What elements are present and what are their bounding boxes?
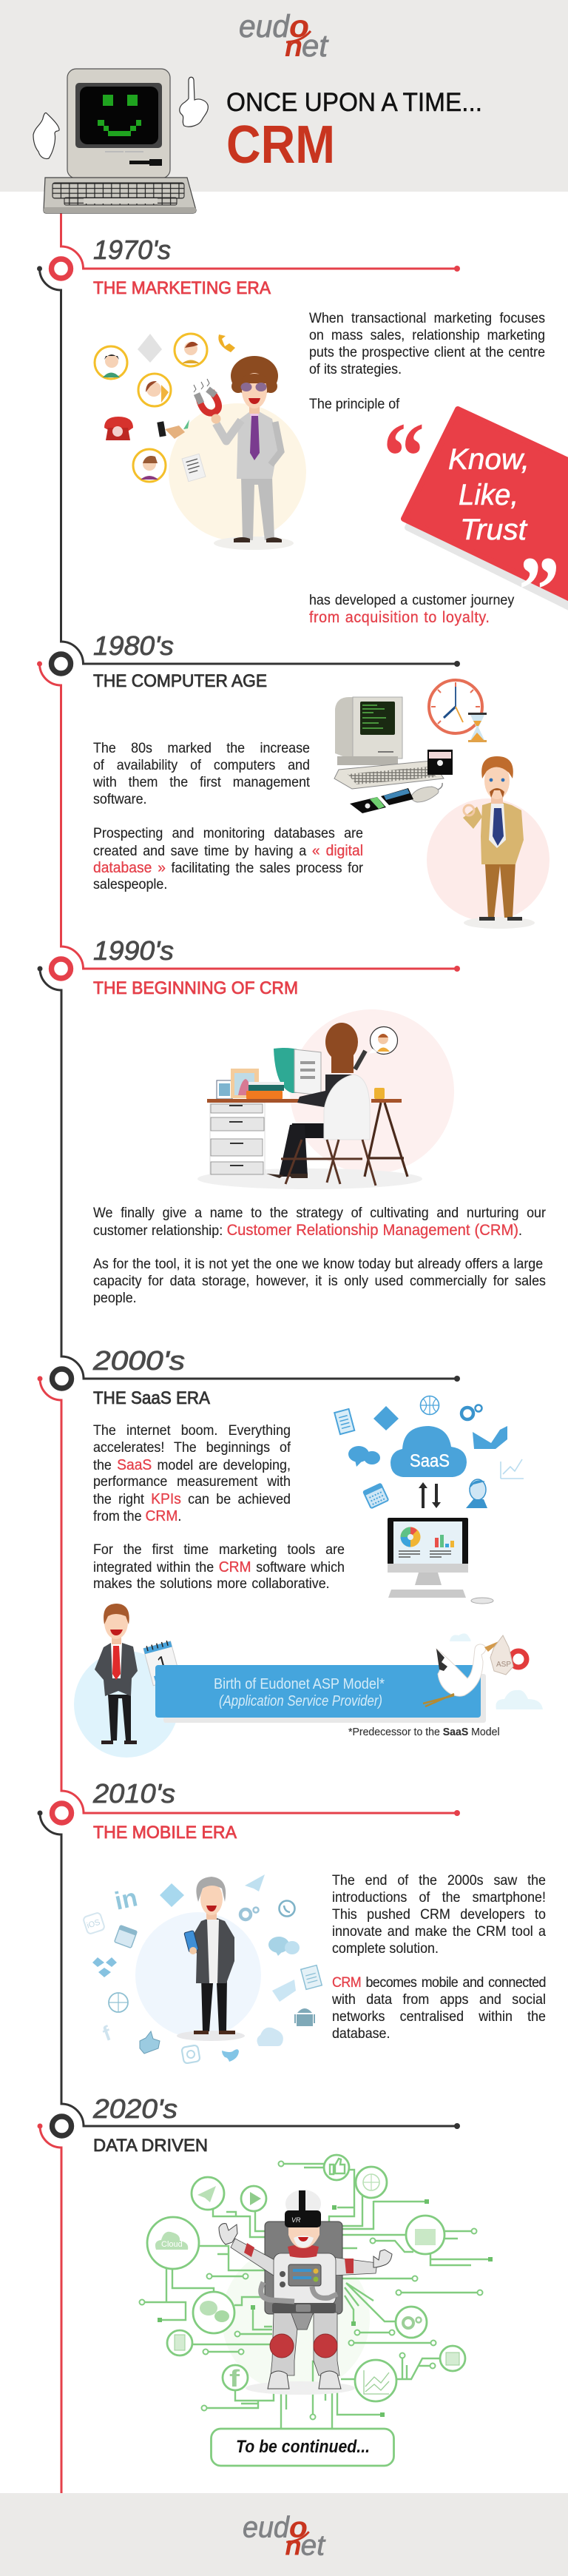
text: the 80s: The 80s marked the increase <box>93 741 310 756</box>
logo: et <box>302 28 329 63</box>
chart: green circuit network: f <box>229 2365 240 2392</box>
footer logo: n <box>285 2531 302 2561</box>
text: relationship marketing: of its strategies. <box>309 362 402 377</box>
icon: speech bubble <box>368 1027 398 1054</box>
icon: left glove <box>33 112 59 159</box>
callout: know like trust banner <box>383 403 568 644</box>
footer logo: o <box>289 2512 308 2544</box>
heading: the saas era: THE SaaS ERA <box>93 1388 210 1408</box>
text: the 80s: of availability of computers and <box>93 758 310 773</box>
text: crm becomes mobile: networks centralised within the <box>332 2009 546 2025</box>
callout: birth of eudonet: Birth of Eudonet ASP Model* <box>214 1676 385 1692</box>
icon: yellow phone <box>218 334 235 352</box>
heading: 1980's: 1980's <box>93 630 174 661</box>
callout: know like trust banner: “ <box>383 403 425 510</box>
icons: social and mobile: f <box>100 2022 115 2045</box>
text: the principle of: The principle of <box>309 397 399 412</box>
heading: data driven: DATA DRIVEN <box>93 2136 208 2156</box>
text: smartphone introduction: introductions of the smartphone! <box>332 1890 546 1906</box>
arrows: up and down <box>419 1482 441 1508</box>
logo: o <box>289 9 309 44</box>
mascot computer <box>44 69 196 213</box>
text: footnote: *Predecessor to the SaaS Model <box>348 1726 500 1738</box>
text: smartphone introduction: complete solution. <box>332 1941 439 1957</box>
text: crm becomes mobile: with data from apps and social <box>332 1992 546 2008</box>
callout: to be continued <box>212 2429 393 2466</box>
text: prospecting <box>93 826 363 892</box>
text: internet boom: accelerates! The beginnings of <box>93 1440 291 1456</box>
callout: know like trust banner: ” <box>518 537 560 644</box>
heading: 2010's: 2010's <box>92 1778 175 1809</box>
callout: birth of eudonet: (Application Service Provider) <box>219 1693 382 1709</box>
text: relationship marketing: When transactional marketing focuses <box>309 311 545 326</box>
heading: the beginning of crm: THE BEGINNING OF CRM <box>93 978 298 998</box>
text: marketing tools: makes the solutions more collaborative. <box>93 1576 330 1592</box>
text: internet boom: the right KPIs can be achieved <box>93 1490 291 1507</box>
illustration: man with moustache <box>427 756 550 929</box>
illustration: monitor dashboard <box>388 1518 493 1604</box>
icon: envelope diamond <box>138 334 162 363</box>
heading: 2020's: 2020's <box>92 2094 178 2124</box>
illustration: stork with logo <box>423 1633 543 1709</box>
footer logo: et <box>301 2530 326 2562</box>
illustration: desktop computer <box>334 697 444 802</box>
text: prospecting: Prospecting and monitoring databases are <box>93 826 363 841</box>
illustration: stork with logo: ASP <box>496 1661 511 1669</box>
callout: to be continued: To be continued... <box>236 2437 370 2457</box>
text: internet boom: The internet boom. Everything <box>93 1423 291 1439</box>
text: customer journey <box>309 593 515 626</box>
text: customer journey: from acquisition to loyalty. <box>309 609 490 626</box>
text: internet boom: performance measurement with <box>93 1474 291 1490</box>
logo <box>239 9 329 63</box>
text: smartphone introduction: This pushed CRM developers to <box>332 1907 546 1923</box>
header band <box>0 0 568 192</box>
text: we finally give a name: customer relationship: Customer Relationship Management (CRM). <box>93 1221 522 1239</box>
illustration: astronaut with vr headset: VR <box>291 2216 301 2224</box>
callout: know like trust banner: Trust <box>460 514 528 546</box>
heading: 2000's: 2000's <box>92 1345 185 1376</box>
chart: green circuit network: Cloud <box>161 2240 183 2249</box>
panel: 1970s <box>93 235 568 644</box>
icon: clock <box>429 680 482 733</box>
illustration: man with smartphone <box>135 1877 261 2041</box>
callout: know like trust banner: Know, <box>448 443 530 476</box>
text: marketing tools <box>93 1542 345 1592</box>
text: we finally give a name: We finally give a name to the strategy of cultivating and nurturing our <box>93 1205 546 1221</box>
footer band <box>0 2493 568 2576</box>
heading: the mobile era: THE MOBILE ERA <box>93 1823 237 1843</box>
text: marketing tools: For the first time marketing tools are <box>93 1542 345 1558</box>
footer logo <box>243 2512 326 2562</box>
heading: 1970's: 1970's <box>93 235 171 265</box>
text: prospecting: created and save time by having a « digital <box>93 842 363 859</box>
icon: hourglass <box>468 713 487 742</box>
icon: calendar <box>143 1640 180 1686</box>
text: prospecting: database » facilitating the sales process for <box>93 859 363 876</box>
icon: floppy disks <box>350 750 453 813</box>
icons: social and mobile: iOS <box>86 1918 101 1931</box>
icon: customer avatars <box>95 334 207 482</box>
icon: red telephone <box>104 417 133 440</box>
text: smartphone introduction: innovate and make the CRM tool a <box>332 1924 546 1940</box>
illustration: astronaut with vr headset <box>219 2190 392 2395</box>
text: crm becomes mobile: database. <box>332 2026 390 2042</box>
panel: 1990s <box>93 935 546 1306</box>
text: customer journey: has developed a customer journey <box>309 593 514 608</box>
text: the 80s <box>93 741 310 807</box>
heading: the computer age: THE COMPUTER AGE <box>93 671 267 691</box>
icon: letter <box>182 454 206 482</box>
icon: pointing hand <box>180 77 208 127</box>
illustration: person at desk <box>197 1009 454 1189</box>
title: CRM <box>226 115 335 175</box>
panel: 2020s <box>92 2094 493 2467</box>
icon: calendar: 1 <box>155 1652 169 1674</box>
text: relationship marketing: on mass sales, relationship marketing <box>309 328 545 343</box>
icon: handshake <box>157 420 189 439</box>
icons: social and mobile: in <box>112 1883 140 1916</box>
text: as for the tool <box>93 1257 546 1306</box>
footer logo: eud <box>243 2512 291 2544</box>
text: relationship marketing <box>309 311 545 377</box>
icons: social and mobile <box>83 1874 322 2064</box>
text: smartphone introduction: The end of the 2000s saw the <box>332 1873 546 1889</box>
text: crm becomes mobile: CRM becomes mobile and connected <box>332 1975 546 1991</box>
illustration: marketing man with magnet <box>169 356 306 550</box>
chart: green circuit network <box>139 2155 493 2429</box>
logo: n <box>285 30 302 63</box>
text: as for the tool: people. <box>93 1291 137 1306</box>
icons: saas floating <box>334 1396 524 1508</box>
title <box>226 88 482 175</box>
text: as for the tool: capacity for data storage, however, it is only used commercially for sales <box>93 1274 546 1289</box>
heading: 1990's: 1990's <box>93 935 174 966</box>
text: crm becomes mobile <box>331 1975 546 2042</box>
title: ONCE UPON A TIME... <box>226 88 482 117</box>
heading: the marketing era: THE MARKETING ERA <box>93 278 271 298</box>
text: internet boom <box>93 1423 291 1524</box>
text: the 80s: with them the first management <box>93 775 310 790</box>
icon: saas cloud: SaaS <box>410 1451 450 1471</box>
text: internet boom: from the CRM. <box>93 1507 181 1524</box>
text: we finally give a name <box>93 1205 546 1239</box>
panel: 2000s <box>74 1345 543 1758</box>
panel: 2010s <box>83 1778 546 2064</box>
panel: header <box>33 9 482 214</box>
logo: eud <box>239 9 291 44</box>
text: prospecting: salespeople. <box>93 877 167 892</box>
text: marketing tools: integrated within the CRM software which <box>93 1558 345 1575</box>
text: smartphone introduction <box>332 1873 546 1957</box>
callout: know like trust banner: Like, <box>459 479 518 511</box>
text: the 80s: software. <box>93 792 146 807</box>
icon: saas cloud <box>390 1426 467 1477</box>
text: internet boom: the SaaS model are developing, <box>93 1456 291 1473</box>
text: as for the tool: As for the tool, it is not yet the one we know today but already offers a large <box>93 1257 543 1272</box>
text: relationship marketing: puts the prospective client at the centre <box>309 345 545 360</box>
panel: 1980s <box>93 630 550 929</box>
callout: birth of eudonet <box>155 1665 486 1723</box>
illustration: businessman <box>74 1604 179 1758</box>
